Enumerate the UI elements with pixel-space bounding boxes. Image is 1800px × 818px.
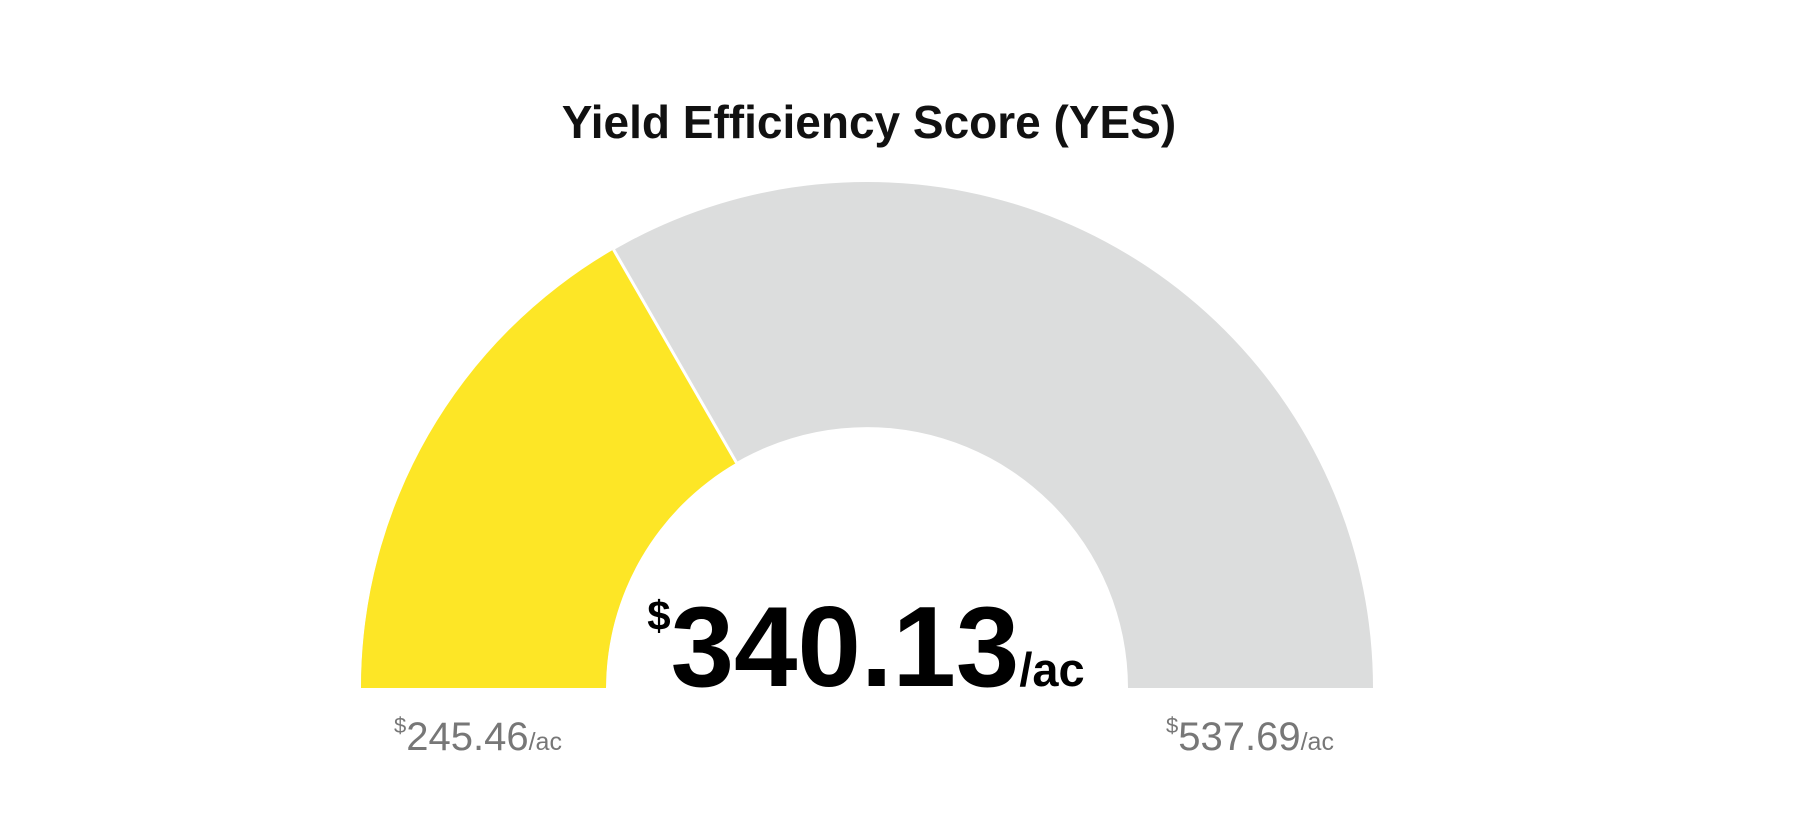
main value: /ac [1019,643,1085,696]
min label: 245.46 [406,715,529,759]
title: Yield Efficiency Score (YES) [562,96,1176,148]
main value: $ [647,592,671,639]
min label: /ac [529,728,562,756]
gauge background arc [361,182,1373,688]
max label: $ [1166,713,1178,738]
max label: 537.69 [1178,715,1301,759]
min label: $ [394,713,406,738]
gauge [361,182,1373,688]
main value: 340.13 [671,584,1019,711]
max label: /ac [1301,728,1334,756]
gauge value arc [361,250,736,688]
